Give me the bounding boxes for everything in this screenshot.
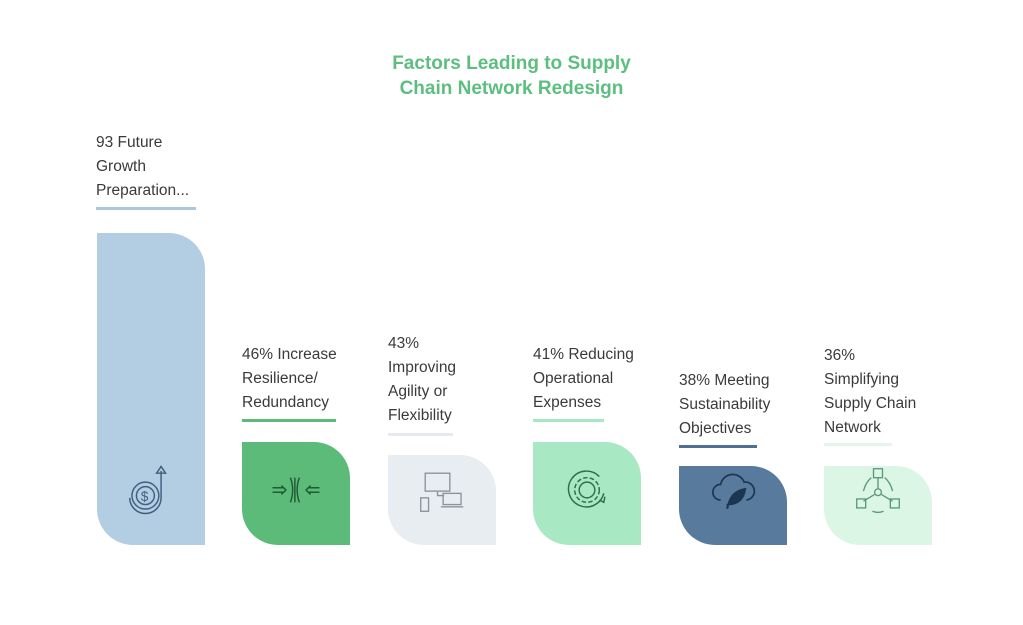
title — [392, 53, 631, 99]
label: 41% — [533, 346, 634, 411]
icon: compress arrows — [272, 477, 320, 503]
icon: gear cycle — [568, 470, 606, 508]
label: 41%: Operational — [533, 370, 613, 387]
label: 43%: Agility or — [388, 383, 447, 400]
icon: network cubes — [856, 468, 900, 514]
icon: dollar growth: $ — [141, 489, 149, 504]
icon: cloud leaf — [712, 474, 756, 510]
label: 43%: 43% — [388, 335, 419, 352]
label: 43%: Flexibility — [388, 407, 452, 424]
label: 36% — [824, 347, 916, 436]
label: 41%: Expenses — [533, 394, 601, 411]
label: 93 Future Growth: Growth — [96, 158, 146, 175]
bar: resilience — [242, 442, 350, 545]
label: 36%: 36% — [824, 347, 855, 364]
label: 46%: 46% Increase — [242, 346, 337, 363]
label: 93 Future Growth: 93 Future — [96, 134, 162, 151]
label: 46%: Resilience/ — [242, 370, 318, 387]
label: 36%: Network — [824, 419, 881, 436]
label: 93 Future Growth — [96, 134, 189, 199]
label: 93 Future Growth: Preparation... — [96, 182, 189, 199]
label: 38% — [679, 372, 770, 437]
icon: dollar growth — [129, 465, 167, 514]
bar: sustainability — [679, 466, 787, 545]
label: 46%: Redundancy — [242, 394, 329, 411]
label: 38%: Objectives — [679, 420, 751, 437]
label: 43%: Improving — [388, 359, 456, 376]
label: 43% — [388, 335, 456, 424]
label: 38%: 38% Meeting — [679, 372, 769, 389]
label: 41%: 41% Reducing — [533, 346, 634, 363]
icon: devices — [420, 472, 464, 512]
bar: future growth — [97, 233, 205, 545]
label: 36%: Simplifying — [824, 371, 899, 388]
title: Chain Network Redesign — [400, 78, 623, 99]
bar: opex — [533, 442, 641, 545]
bar: agility — [388, 455, 496, 545]
label: 38%: Sustainability — [679, 396, 770, 413]
label: 46% — [242, 346, 337, 411]
title: Factors Leading to Supply — [392, 53, 631, 74]
bar: simplifying — [824, 466, 932, 545]
label: 36%: Supply Chain — [824, 395, 916, 412]
